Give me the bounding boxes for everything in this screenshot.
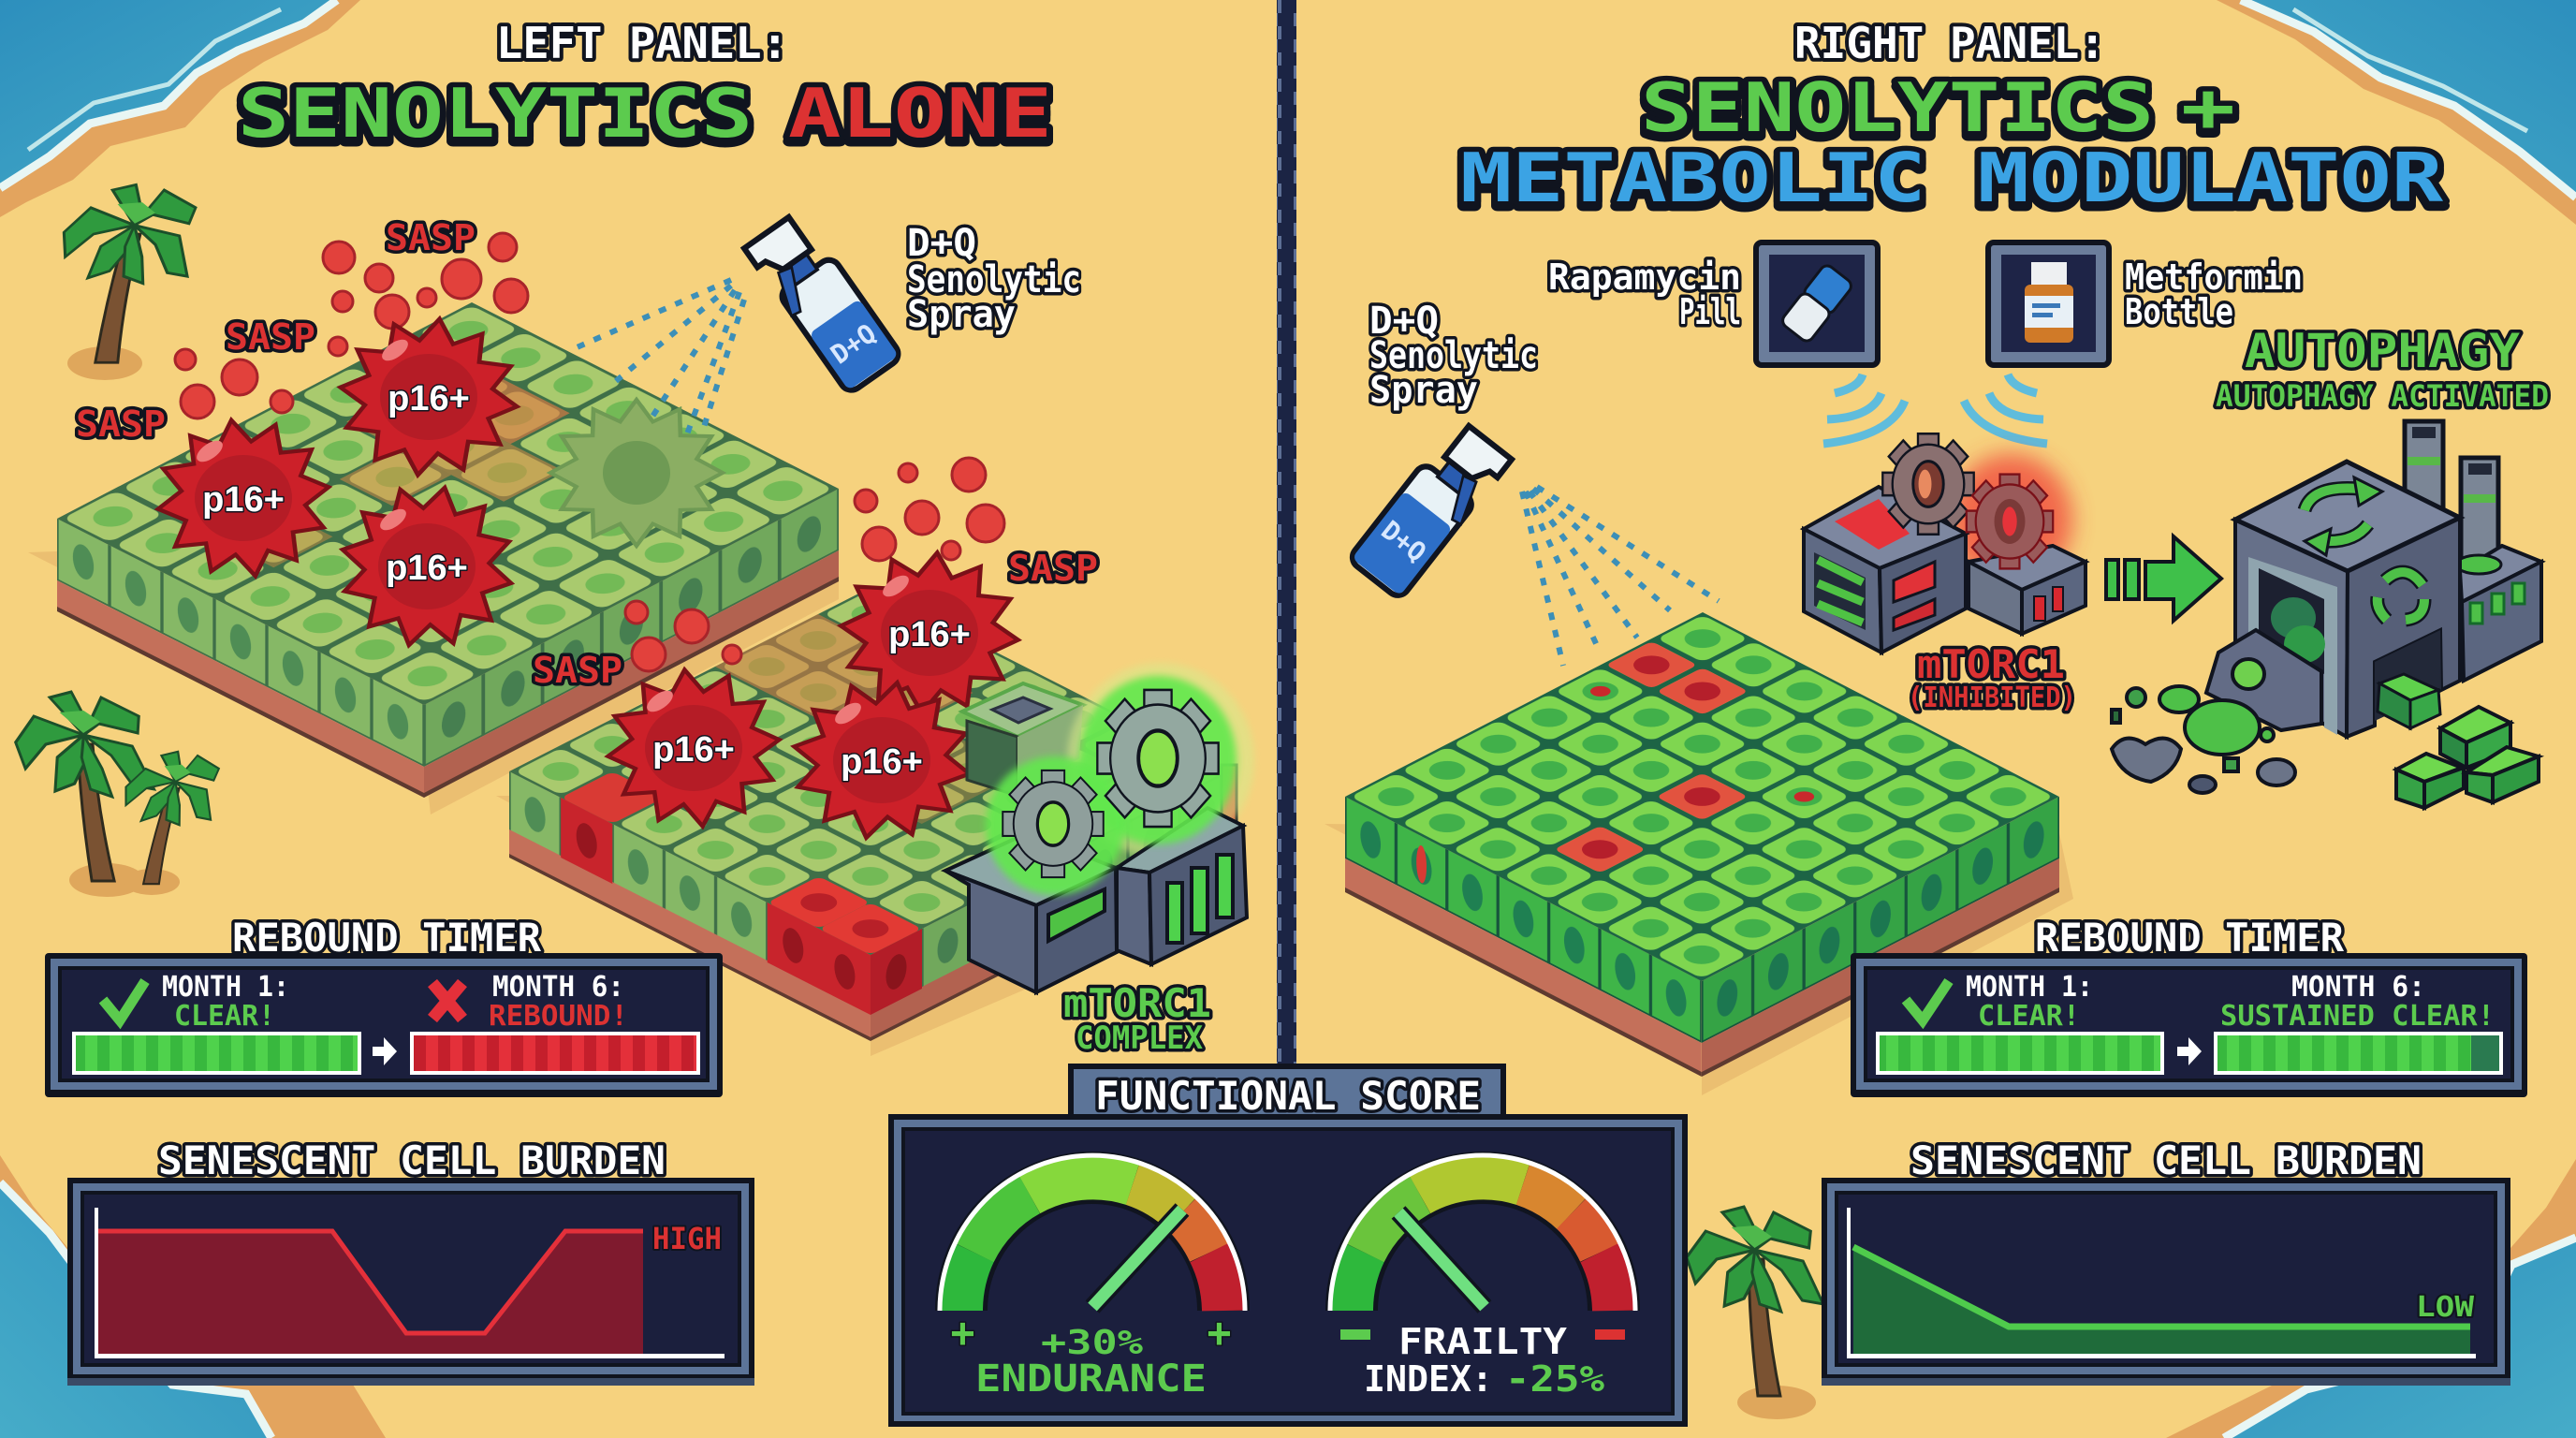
right panel title: METABOLIC MODULATOR: [1460, 139, 2444, 217]
high label: HIGH: [652, 1221, 722, 1256]
rubble and recycled green cubes: [2112, 659, 2539, 808]
gauge: frailty index: [1330, 1155, 1635, 1311]
spray label: left: D+Q: [907, 222, 976, 265]
mTORC1 complex label: COMPLEX: [1076, 1020, 1203, 1057]
palm trees: lower left pair: [7, 692, 226, 897]
month 6 status: MONTH 6:: [492, 971, 624, 1004]
month 1 bar: [74, 1034, 359, 1073]
spray label: right: Senolytic: [1369, 334, 1538, 377]
rapamycin label: Rapamycin: [1548, 257, 1741, 298]
spray label: right: [1369, 300, 1538, 412]
month 6 status: [489, 971, 628, 1033]
spray bottle: right: D+Q: [1375, 515, 1432, 568]
gauge: endurance: [940, 1155, 1245, 1311]
beach corner: bottom right: [2166, 1159, 2576, 1438]
burden title: SENESCENT CELL BURDEN: [1910, 1137, 2422, 1183]
rapamycin label: [1548, 257, 1741, 332]
SASP labels: SASP: [386, 217, 476, 258]
month 1 status: CLEAR!: [174, 1000, 275, 1033]
progress arrow: [2177, 1037, 2202, 1065]
signal waves: rapamycin: [1823, 374, 1905, 444]
rapamycin label: Pill: [1679, 291, 1741, 332]
senescent cell p16+ six: p16+: [841, 742, 923, 782]
panel: rebound timer right: [1851, 915, 2527, 1097]
frailty readout: INDEX:: [1364, 1358, 1493, 1400]
autophagy labels: AUTOPHAGY: [2245, 324, 2520, 378]
endurance readout: +: [1207, 1309, 1232, 1357]
mTORC1 machine: inhibited: [1804, 433, 2086, 653]
right panel title: +: [2181, 68, 2235, 147]
autophagy labels: [2216, 324, 2549, 414]
frailty readout: FRAILTY: [1398, 1321, 1567, 1362]
tissue board: right, senolytics plus modulator: [1325, 612, 2073, 1095]
SASP labels: SASP: [76, 404, 166, 445]
cleared senescent cell: [550, 400, 723, 546]
panel: rebound timer left: [45, 915, 723, 1097]
left panel title: ALONE: [788, 74, 1052, 153]
senescent cell p16+ three: [325, 471, 529, 662]
endurance readout: ENDURANCE: [975, 1357, 1207, 1401]
month 1 status: [162, 971, 289, 1033]
check mark: [103, 981, 145, 1020]
spray bottle: right: [1348, 418, 1512, 601]
spray bottle: left: [744, 210, 902, 395]
spray label: left: Spray: [907, 293, 1016, 336]
center divider: [1277, 0, 1296, 1067]
month 1 status: MONTH 1:: [162, 971, 289, 1004]
mTORC1 inhibited label: (INHIBITED): [1908, 682, 2076, 714]
burden chart sustained curve: [1847, 1208, 2476, 1358]
palm tree: upper left: [41, 184, 203, 380]
month 6 bar: [412, 1034, 698, 1073]
endurance readout: +: [950, 1309, 975, 1357]
panel: senescent cell burden right: [1822, 1137, 2510, 1386]
endurance readout: [950, 1309, 1232, 1401]
metformin label: Metformin: [2125, 257, 2303, 298]
SASP labels: SASP: [533, 650, 622, 691]
tissue board: lower left, rebound: [496, 588, 1232, 1056]
month 1 status: [1966, 971, 2093, 1033]
spray label: right: Spray: [1369, 369, 1478, 412]
metformin label: [2125, 257, 2303, 332]
frailty readout: [1340, 1321, 1625, 1400]
senescent cell p16+ four: [833, 546, 1026, 720]
senescent cell p16+ two: [146, 409, 341, 587]
SASP particles: [175, 233, 1004, 671]
mTORC1 inhibited label: mTORC1: [1917, 641, 2065, 687]
palm tree: centre bottom: [1680, 1207, 1835, 1419]
spray mist: left: [575, 280, 744, 477]
right panel title: [1460, 18, 2444, 217]
month 6 status: MONTH 6:: [2291, 971, 2425, 1004]
SASP labels: SASP: [226, 316, 315, 358]
senescent cell p16+ one: p16+: [388, 379, 470, 418]
month 6 status: SUSTAINED CLEAR!: [2220, 1000, 2495, 1033]
functional score title: FUNCTIONAL SCORE: [1095, 1073, 1481, 1119]
right panel title: RIGHT PANEL:: [1794, 18, 2105, 68]
burden chart rebound curve: [95, 1208, 724, 1358]
senescent cell p16+ five: p16+: [652, 730, 735, 770]
right panel title: SENOLYTICS: [1641, 68, 2154, 147]
spray label: left: [907, 222, 1081, 336]
metformin label: Bottle: [2125, 291, 2233, 332]
check mark: [1906, 981, 1949, 1020]
month 1 status: CLEAR!: [1978, 1000, 2080, 1033]
mTORC1 complex label: [1063, 980, 1211, 1057]
SASP labels: SASP: [1008, 548, 1098, 589]
icon: rapamycin pill: [1756, 242, 1878, 365]
frailty readout: -25%: [1505, 1358, 1604, 1400]
tissue board: upper left, senolytics alone: [28, 302, 839, 814]
left panel title: [238, 18, 1052, 153]
senescent cell p16+ four: p16+: [888, 615, 971, 654]
autophagy labels: AUTOPHAGY ACTIVATED: [2216, 378, 2549, 414]
panel: senescent cell burden left: [67, 1137, 754, 1386]
icon: metformin bottle: [1988, 242, 2109, 365]
left panel title: SENOLYTICS: [238, 74, 753, 153]
spray bottle: left: D+Q: [825, 317, 882, 371]
burden title: SENESCENT CELL BURDEN: [158, 1137, 666, 1183]
senescent cell p16+ one: [329, 309, 528, 485]
SASP labels: [76, 217, 1098, 691]
endurance readout: +30%: [1041, 1324, 1143, 1362]
senescent cell p16+ three: p16+: [386, 549, 468, 588]
beach corner: top left: [0, 0, 360, 217]
low label: LOW: [2416, 1291, 2475, 1324]
month 6 bar: [2216, 1034, 2501, 1073]
spray mist: right: [1522, 487, 1719, 666]
senescent cell p16+ five: [599, 662, 788, 834]
beach corner: top right: [2217, 0, 2576, 225]
beach corner: bottom left: [0, 1155, 386, 1438]
cross mark: [432, 983, 462, 1019]
month 1 bar: [1878, 1034, 2162, 1073]
timer title: REBOUND TIMER: [2035, 915, 2345, 961]
mTORC1 complex label: mTORC1: [1063, 980, 1211, 1026]
timer title: REBOUND TIMER: [232, 915, 542, 961]
panel: functional score: [888, 1064, 1688, 1427]
month 6 status: REBOUND!: [489, 1000, 628, 1033]
spray label: left: Senolytic: [907, 258, 1081, 301]
senescent cell p16+ two: p16+: [202, 480, 285, 520]
mTORC1 inhibited label: [1908, 641, 2076, 714]
month 1 status: MONTH 1:: [1966, 971, 2093, 1004]
progress arrow: [373, 1037, 397, 1065]
month 6 status: [2220, 971, 2495, 1033]
arrow to autophagy: [2106, 536, 2221, 621]
mTORC1 complex machine: active: [945, 663, 1254, 992]
signal waves: metformin: [1964, 374, 2047, 444]
recycling factory: [2206, 421, 2541, 737]
spray label: right: D+Q: [1369, 300, 1439, 343]
senescent cell p16+ six: [779, 669, 985, 851]
left panel title: LEFT PANEL:: [496, 18, 788, 68]
